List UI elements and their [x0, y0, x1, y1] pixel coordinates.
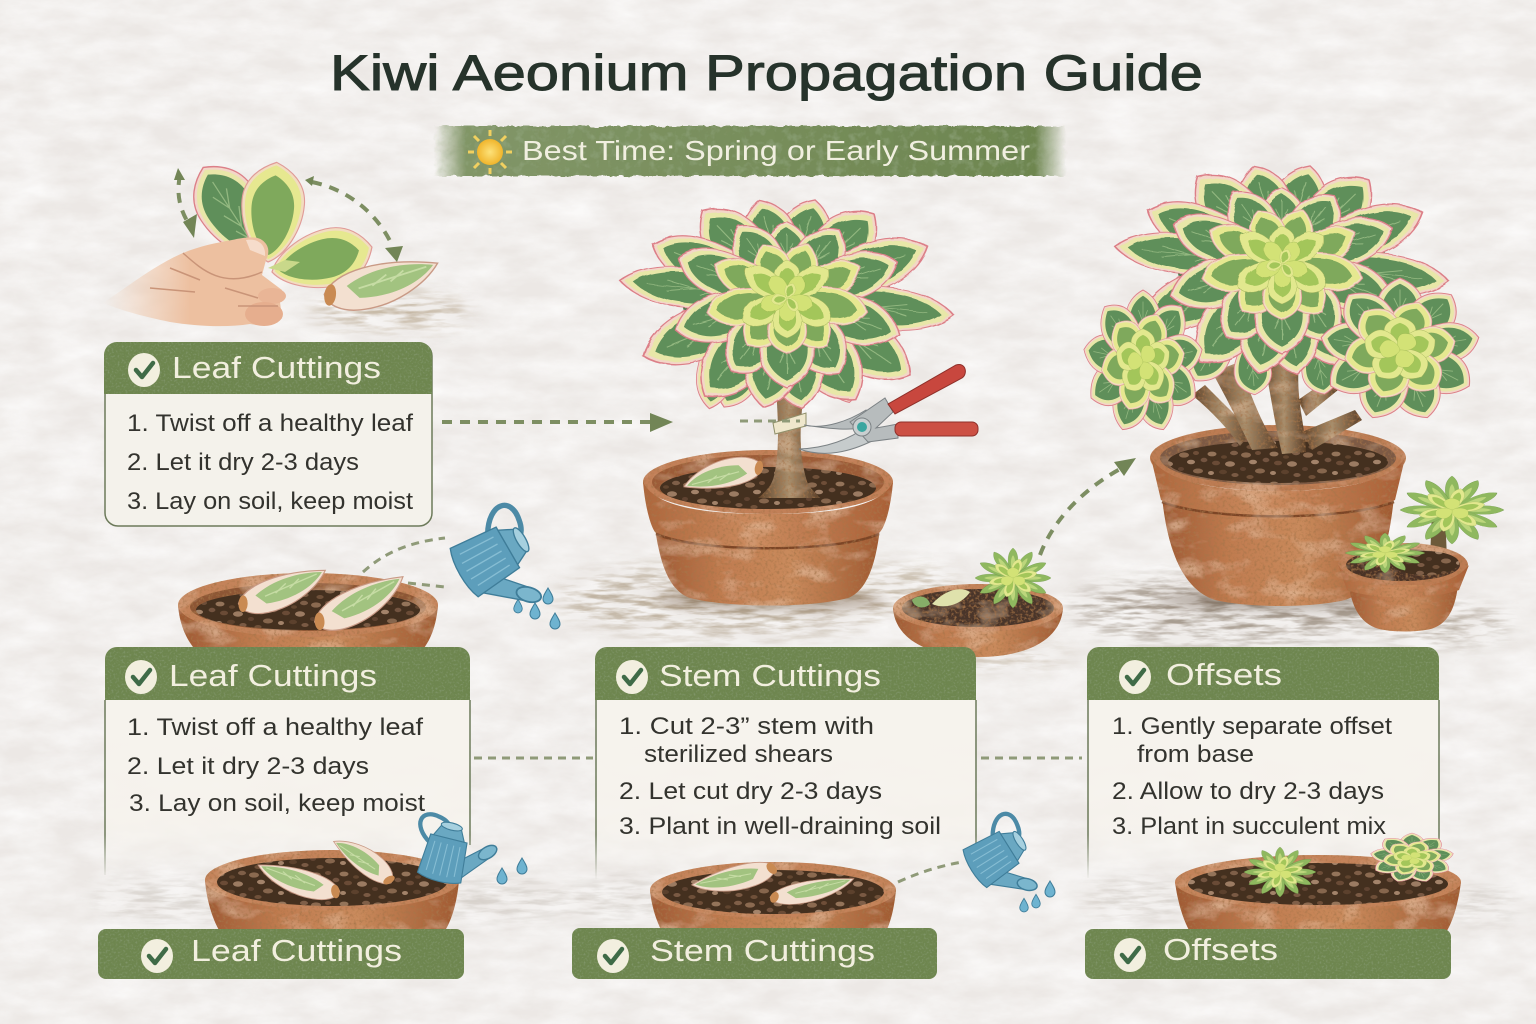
- panel header: Offsets: [1166, 657, 1282, 692]
- panel steps: 1. Gently separate offset: [1112, 713, 1392, 740]
- icon: watering can bottom middle: [955, 810, 1055, 915]
- icon: pruning shears: [799, 365, 978, 453]
- panel steps: sterilized shears: [644, 741, 833, 768]
- panel steps: [619, 713, 941, 840]
- pot back rim: [1150, 425, 1406, 491]
- label bar: leaf cuttings: Leaf Cuttings: [191, 933, 402, 968]
- panel steps: 3. Plant in well-draining soil: [619, 813, 941, 840]
- panel header: Leaf Cuttings: [172, 350, 381, 385]
- title: Kiwi Aeonium Propagation Guide: [330, 45, 1203, 101]
- right offset rosette: [1317, 278, 1483, 425]
- panel steps: from base: [1137, 741, 1254, 768]
- panel steps: 2. Let it dry 2-3 days: [127, 449, 359, 476]
- connector dashes between panels: [474, 756, 1082, 760]
- ground texture: [90, 296, 1520, 923]
- leaf on soil: [682, 456, 766, 490]
- label bar: stem cuttings: [572, 928, 937, 979]
- illustration: small pot with offsets: [1338, 476, 1504, 632]
- cut mark: [773, 413, 806, 434]
- trunk: [758, 385, 820, 498]
- soil: [1168, 441, 1388, 483]
- panel: stem cuttings: [595, 647, 976, 880]
- illustration: stem cutting plant: [618, 192, 956, 610]
- left offset rosette: [1081, 290, 1205, 437]
- water drops: [1020, 881, 1055, 912]
- illustration: mature plant with offsets: [1081, 158, 1483, 610]
- pot front: [1151, 458, 1405, 606]
- panel steps: 1. Twist off a healthy leaf: [127, 410, 413, 437]
- panel steps: [127, 714, 425, 817]
- icon: sun: [468, 130, 512, 174]
- panel header: Leaf Cuttings: [169, 658, 377, 693]
- water drops: [497, 858, 527, 884]
- panel header: [1087, 647, 1439, 700]
- illustration: offsets pot bottom: [1175, 833, 1461, 935]
- icon: watering can top: [440, 501, 561, 632]
- illustration: hand twisting off leaf: [103, 151, 379, 326]
- banner text: Best Time: Spring or Early Summer: [522, 135, 1030, 166]
- arrow: leaf panel to plant: [442, 413, 673, 432]
- illustration: leaf pot top: [178, 566, 438, 655]
- panel steps: 3. Plant in succulent mix: [1112, 813, 1386, 840]
- label bar: stem cuttings: Stem Cuttings: [650, 933, 875, 968]
- panel steps: [127, 410, 413, 515]
- label bar: offsets: [1085, 929, 1451, 979]
- panel header: [595, 647, 976, 700]
- panel steps: 2. Allow to dry 2-3 days: [1112, 778, 1384, 805]
- panel: leaf cuttings top: [104, 342, 432, 526]
- main rosette: [1113, 158, 1451, 381]
- pot front: [643, 482, 893, 606]
- panel steps: 2. Let it dry 2-3 days: [127, 753, 369, 780]
- illustration: leaf pot bottom: [205, 826, 459, 935]
- panel header: Stem Cuttings: [659, 658, 881, 693]
- panel steps: [1112, 713, 1392, 840]
- water drops: [514, 588, 560, 629]
- label bar: leaf cuttings: [98, 929, 464, 979]
- pot shadow: [655, 590, 885, 610]
- panel steps: 3. Lay on soil, keep moist: [127, 488, 413, 515]
- illustration: pot with sprout: [893, 548, 1063, 657]
- arrow: stem pot to watering can: [898, 862, 962, 882]
- best time banner: [434, 126, 1066, 176]
- panel: offsets: [1087, 647, 1439, 878]
- rosette: [618, 192, 956, 415]
- label bar: offsets: Offsets: [1163, 932, 1278, 967]
- panel steps: 1. Cut 2-3” stem with: [619, 713, 874, 740]
- panel header: [105, 647, 470, 700]
- panel steps: 1. Twist off a healthy leaf: [127, 714, 423, 741]
- under leaves: [691, 317, 867, 416]
- illustration: fallen leaf cutting: [319, 258, 442, 314]
- illustration: stem pot bottom: [650, 852, 896, 935]
- panel steps: 2. Let cut dry 2-3 days: [619, 778, 882, 805]
- icon: watering can bottom left: [408, 812, 527, 894]
- arrow: sprout to grown plant: [1040, 458, 1136, 555]
- panel: leaf cuttings: [105, 647, 470, 875]
- pot shadow: [1155, 590, 1385, 610]
- under leaves: [1177, 310, 1383, 397]
- arrow: top leaf pot to watering can: [363, 538, 445, 587]
- panel steps: 3. Lay on soil, keep moist: [129, 790, 425, 817]
- soil: [660, 467, 876, 509]
- trunks: [1192, 345, 1362, 454]
- panel header: [104, 342, 432, 394]
- arrows: twist direction: [174, 168, 403, 262]
- pot back rim: [643, 450, 893, 514]
